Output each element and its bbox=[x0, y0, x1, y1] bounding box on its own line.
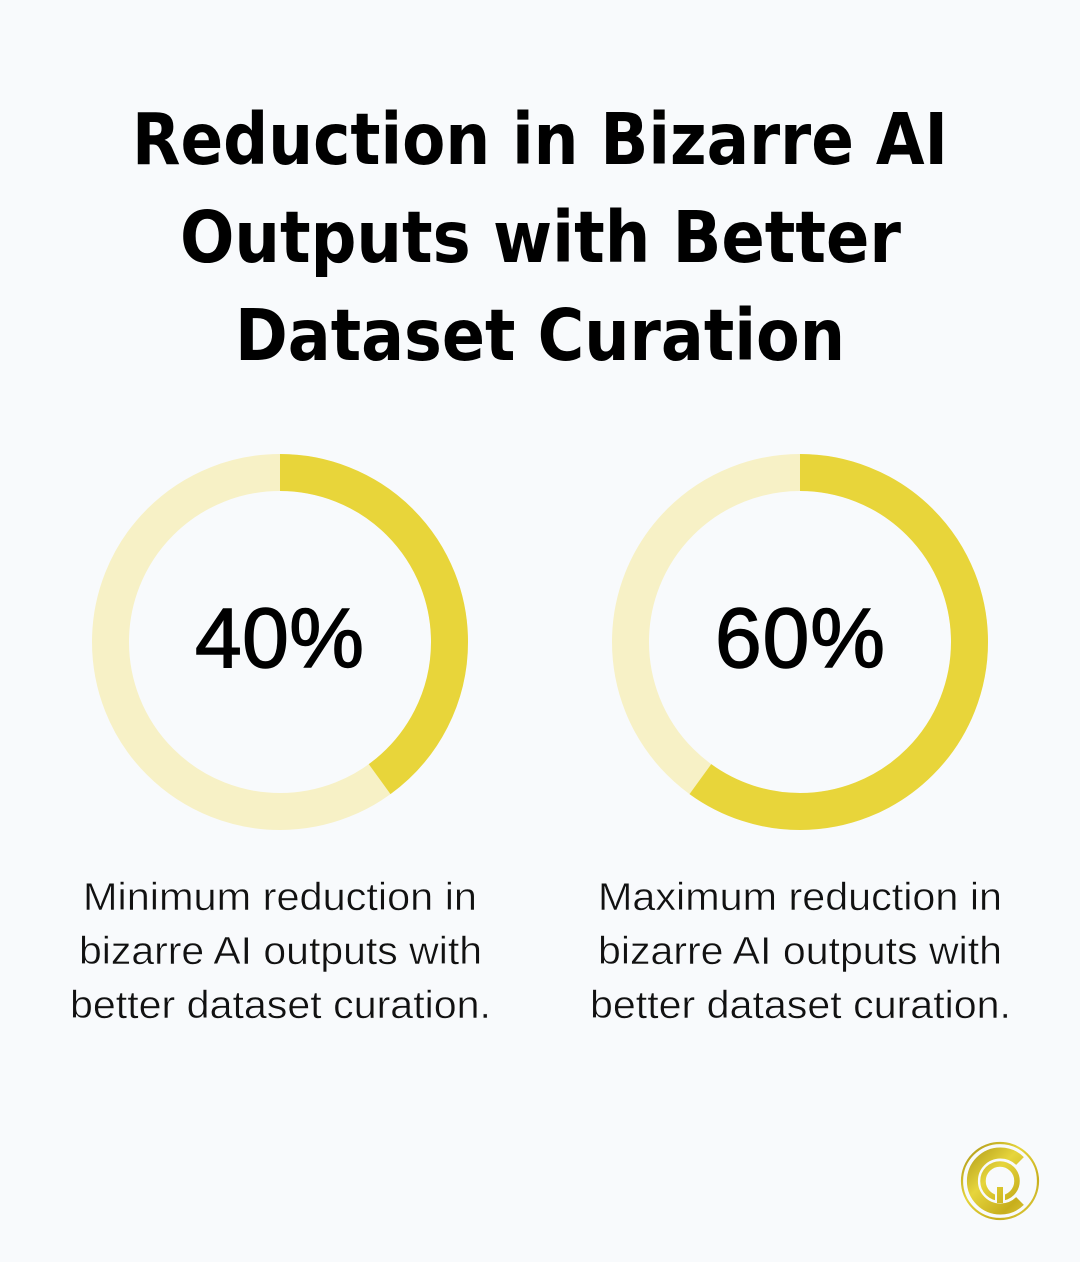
title: Outputs with Better bbox=[180, 196, 901, 279]
caption: minimum reduction bbox=[70, 876, 491, 1027]
caption: minimum reduction: Minimum reduction in bbox=[83, 876, 477, 919]
donut chart: 40% bbox=[110, 472, 450, 812]
donut chart: 60% bbox=[630, 472, 970, 812]
icon: gold logo bbox=[962, 1143, 1038, 1219]
panel: minimum reduction bbox=[70, 472, 491, 1027]
title: Dataset Curation bbox=[235, 294, 845, 377]
title: Reduction in Bizarre AI bbox=[132, 98, 948, 181]
title bbox=[132, 98, 948, 377]
stat: 60%: 60% bbox=[715, 591, 885, 685]
caption: maximum reduction: better dataset curation. bbox=[590, 984, 1011, 1027]
stat: 40%: 40% bbox=[195, 591, 364, 685]
caption: maximum reduction: Maximum reduction in bbox=[598, 876, 1002, 919]
caption: maximum reduction bbox=[590, 876, 1011, 1027]
caption: maximum reduction: bizarre AI outputs with bbox=[598, 930, 1002, 973]
caption: minimum reduction: better dataset curation. bbox=[70, 984, 491, 1027]
panel: maximum reduction bbox=[590, 472, 1011, 1027]
caption: minimum reduction: bizarre AI outputs with bbox=[79, 930, 482, 973]
